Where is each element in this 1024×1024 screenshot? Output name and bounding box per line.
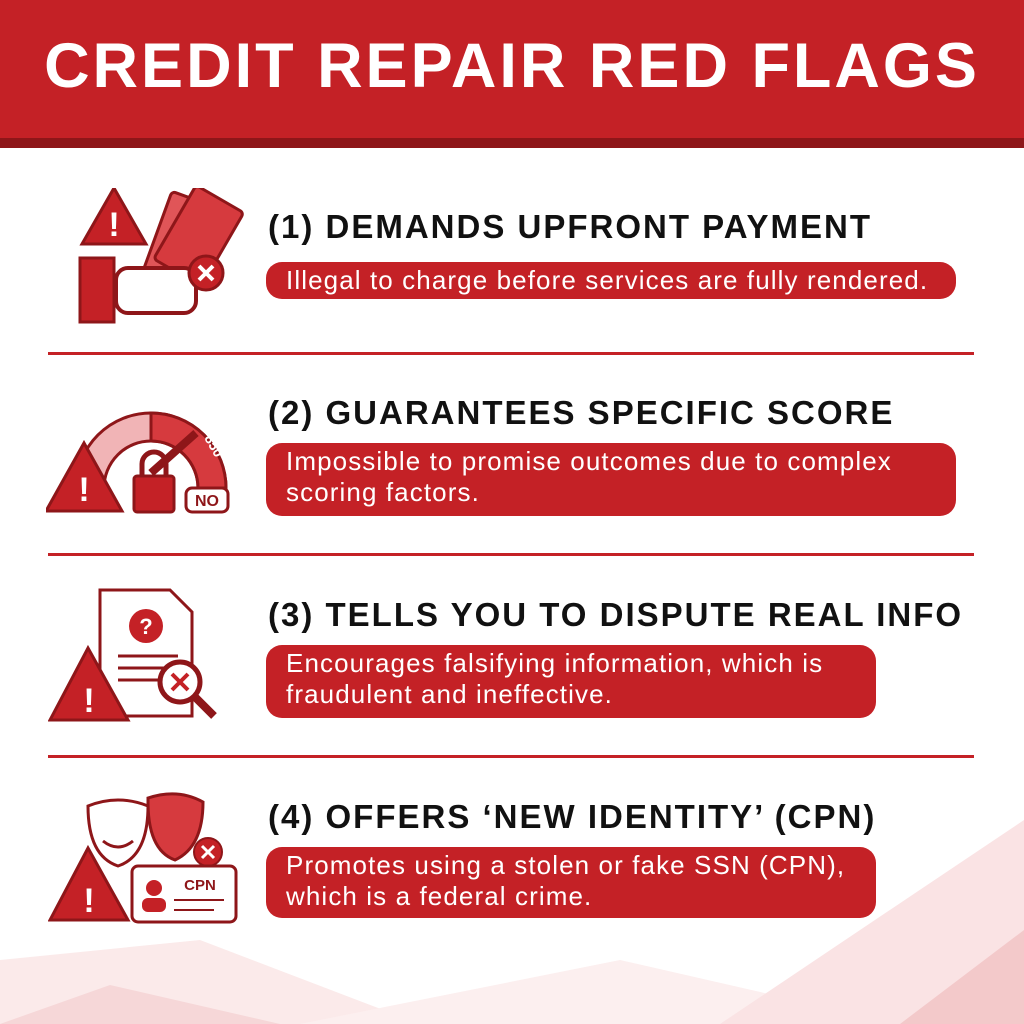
title: CREDIT REPAIR RED FLAGS — [44, 31, 980, 101]
icon: masks and ID: ! — [83, 882, 95, 920]
icon: disputed document — [48, 588, 217, 722]
icon: score gauge: 850 — [201, 432, 227, 460]
icon: score gauge — [46, 412, 230, 514]
panel: flag 4 — [48, 792, 876, 924]
icon: disputed document: ! — [83, 682, 95, 720]
icon: score gauge: ! — [78, 471, 90, 509]
panel: flag 1 — [78, 188, 956, 324]
heading 1: (1) DEMANDS UPFRONT PAYMENT — [268, 208, 872, 245]
pill 3: Encourages falsifying information, which is fraudulent and ineffective. — [286, 648, 823, 709]
heading 3: (3) TELLS YOU TO DISPUTE REAL INFO — [268, 596, 963, 633]
icon: score gauge: NO — [195, 493, 219, 510]
icon: disputed document: ? — [139, 614, 153, 639]
pill 2: Impossible to promise outcomes due to complex scoring factors. — [286, 446, 892, 507]
panel: flag 3 — [48, 588, 963, 722]
panel: flag 2 — [46, 394, 956, 516]
icon: payment hand: ! — [108, 206, 120, 244]
heading 2: (2) GUARANTEES SPECIFIC SCORE — [268, 394, 894, 431]
icon: masks and ID — [48, 792, 238, 924]
pill 4: Promotes using a stolen or fake SSN (CPN), which is a federal crime. — [286, 850, 845, 911]
pill 1: Illegal to charge before services are fully rendered. — [286, 265, 928, 295]
icon: payment hand — [78, 188, 244, 324]
header banner — [0, 0, 1024, 148]
background decoration — [0, 820, 1024, 1024]
icon: masks and ID: CPN — [184, 877, 216, 894]
heading 4: (4) OFFERS ‘NEW IDENTITY’ (CPN) — [268, 798, 876, 835]
